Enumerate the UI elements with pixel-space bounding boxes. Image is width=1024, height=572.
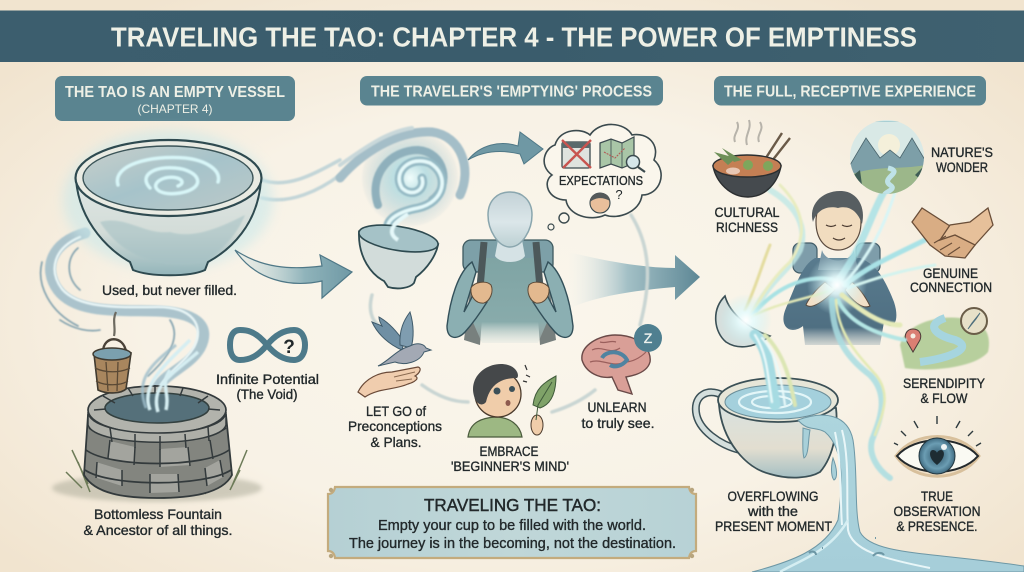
icon: empty bowl	[63, 130, 273, 275]
label: nature's wonder: WONDER	[936, 160, 988, 175]
label: true observation	[894, 489, 980, 534]
icon: wooden bucket	[93, 312, 131, 393]
label: genuine connection: CONNECTION	[910, 280, 992, 295]
title band	[0, 10, 1024, 62]
label: used but never filled: Used, but never filled.	[102, 282, 237, 298]
callout: traveling the tao: Empty your cup to be filled with the world.	[378, 518, 646, 534]
label: serendipity and flow	[903, 376, 985, 406]
label: true observation: TRUE	[921, 489, 953, 504]
icon: crossed out calendar	[562, 140, 591, 168]
icon: brain with unlearn symbol: Z	[644, 330, 653, 346]
heading: empty vessel: (CHAPTER 4)	[138, 102, 212, 116]
panel: the full receptive experience	[696, 76, 1024, 572]
heading: emptying process	[360, 76, 663, 106]
label: cultural richness	[714, 205, 780, 235]
icon: map with magnifier	[600, 137, 645, 172]
cycle arrows	[370, 215, 647, 412]
icon: soup bowl with chopsticks	[713, 120, 790, 197]
heading: empty vessel	[55, 76, 295, 121]
label: let go of preconceptions: LET GO of	[366, 403, 426, 419]
energy glow at heart	[807, 255, 867, 315]
callout: traveling the tao: The journey is in the becoming, not the destination.	[349, 536, 676, 552]
icon: pouring bowl	[716, 294, 772, 347]
swirl: vessel to well	[41, 160, 340, 412]
label: unlearn: to truly see.	[582, 415, 654, 431]
label: expectations: EXPECTATIONS	[559, 173, 643, 188]
arrow: process to full experience	[568, 252, 700, 308]
flowing ribbons into traveler	[745, 185, 935, 320]
label: cultural richness: CULTURAL	[714, 205, 780, 220]
label: infinite potential: Infinite Potential	[216, 372, 319, 387]
arrow: swirl to expectations	[468, 132, 543, 164]
label: let go of preconceptions	[348, 403, 442, 450]
panel: the Tao is an empty vessel	[41, 76, 352, 538]
label: overflowing with the present moment	[715, 489, 832, 534]
icon: bird released from hand	[358, 312, 431, 397]
label: serendipity and flow: SERENDIPITY	[903, 376, 985, 391]
water stream from bowl into cup	[755, 335, 795, 405]
label: serendipity and flow: & FLOW	[920, 391, 968, 406]
icon: infinity with question mark: ?	[283, 337, 295, 358]
icon: overflowing teacup	[696, 378, 838, 478]
arrow: vessel to process	[235, 250, 352, 298]
label: true observation: & PRESENCE.	[896, 519, 978, 534]
label: embrace beginner's mind	[451, 444, 569, 474]
label: nature's wonder: NATURE'S	[931, 145, 993, 160]
label: overflowing with the present moment: OVERFLOWING	[728, 489, 818, 504]
label: unlearn	[582, 399, 654, 431]
label: true observation: OBSERVATION	[894, 504, 980, 519]
traveler receiving the world	[783, 191, 896, 345]
thought bubble: expectations	[544, 124, 661, 230]
traveler with blank face	[447, 192, 573, 345]
ribbons to serendipity and eye	[832, 295, 905, 478]
label: genuine connection	[910, 266, 992, 295]
label: nature's wonder	[931, 145, 993, 175]
label: embrace beginner's mind: 'BEGINNER'S MIND'	[451, 459, 569, 474]
label: unlearn: UNLEARN	[588, 399, 646, 415]
icon: infinity with question mark	[230, 330, 305, 360]
callout: traveling the tao: TRAVELING THE TAO:	[424, 495, 601, 515]
label: embrace beginner's mind: EMBRACE	[480, 444, 538, 459]
label: infinite potential: (The Void)	[236, 387, 298, 402]
water overflowing to the bottom	[752, 415, 1024, 572]
label: cultural richness: RICHNESS	[716, 220, 778, 235]
icon: worried face: ?	[615, 187, 623, 202]
title band: TRAVELING THE TAO: CHAPTER 4 - THE POWER OF EMPTINESS	[111, 22, 917, 52]
icon: brain with unlearn symbol	[582, 324, 662, 394]
icon: eye with heart	[894, 416, 981, 476]
icon: map with river and compass	[900, 308, 989, 369]
label: infinite potential	[216, 372, 319, 402]
label: overflowing with the present moment: with the	[747, 504, 798, 519]
label: bottomless fountain: & Ancestor of all things.	[84, 522, 232, 538]
label: bottomless fountain	[84, 506, 232, 538]
label: bottomless fountain: Bottomless Fountain	[94, 506, 222, 522]
icon: child with leaf	[468, 364, 556, 437]
icon: swirl rising from bowl	[340, 128, 465, 288]
heading: empty vessel: THE TAO IS AN EMPTY VESSEL	[65, 84, 285, 101]
callout: traveling the tao	[328, 487, 696, 558]
heading: full receptive experience: THE FULL, RECEPTIVE EXPERIENCE	[724, 84, 976, 100]
heading: emptying process: THE TRAVELER'S 'EMPTYING' PROCESS	[371, 84, 652, 100]
label: genuine connection: GENUINE	[923, 266, 978, 281]
label: let go of preconceptions: & Plans.	[370, 434, 422, 450]
heading: full receptive experience	[714, 76, 986, 106]
label: overflowing with the present moment: PRESENT MOMENT	[715, 519, 832, 534]
panel: the traveler's emptying process	[340, 76, 700, 474]
label: let go of preconceptions: Preconceptions	[348, 418, 442, 434]
icon: mountains vignette	[850, 120, 925, 196]
icon: handshake	[912, 208, 993, 258]
icon: bottomless well	[52, 340, 262, 502]
